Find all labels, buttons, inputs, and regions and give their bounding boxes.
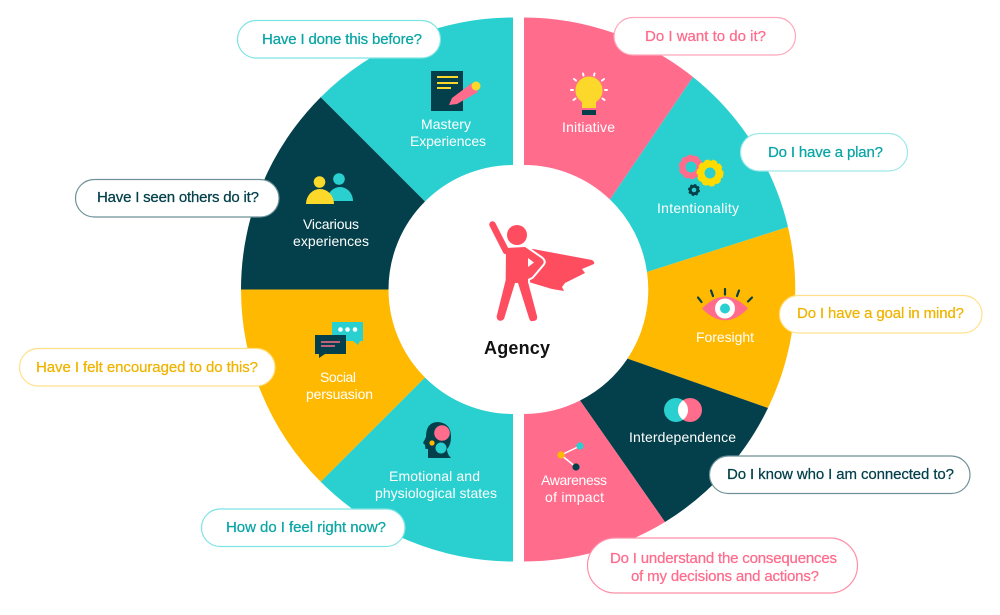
callout: How do I feel right now? <box>202 509 405 546</box>
label: Social persuasion: persuasion <box>306 386 373 402</box>
label: Social persuasion: Social <box>320 369 356 385</box>
label: Vicarious experiences <box>293 216 369 249</box>
label: Vicarious experiences: Vicarious <box>303 216 359 232</box>
label: Social persuasion <box>306 369 373 402</box>
icon: two people <box>306 173 353 204</box>
label: Emotional and physiological states <box>375 468 497 501</box>
callout: Do I know who I am connected to? <box>710 456 970 494</box>
wheel: agency ring <box>241 18 795 562</box>
label: Awareness of impact: Awareness <box>541 472 607 488</box>
callout: Do I want to do it? <box>614 18 796 55</box>
segment: vicarious experiences <box>241 97 425 290</box>
label: Vicarious experiences: experiences <box>293 233 369 249</box>
callout: Have I done this before?: Have I done this before? <box>262 31 422 48</box>
icon: superhero with cape <box>492 224 594 321</box>
callout: Do I understand the consequences of my decisions and actions?: of my decisions and actions? <box>631 568 819 585</box>
callout: Do I know who I am connected to?: Do I know who I am connected to? <box>727 466 954 483</box>
segment: emotional and physiological states <box>321 378 513 562</box>
callout: Do I understand the consequences of my decisions and actions? <box>588 538 858 593</box>
segment: initiative <box>524 18 693 200</box>
label: Foresight: Foresight <box>696 329 754 345</box>
callout: Have I felt encouraged to do this?: Have I felt encouraged to do this? <box>36 359 258 376</box>
label: Mastery Experiences <box>410 116 486 149</box>
label: Initiative: Initiative <box>562 119 615 135</box>
icon: eye <box>698 289 752 320</box>
icon: speech bubbles <box>315 322 363 358</box>
callout: Have I done this before? <box>238 20 440 58</box>
segment: social persuasion <box>241 290 425 482</box>
label: Awareness of impact: of impact <box>545 489 604 505</box>
label: Awareness of impact <box>541 472 607 505</box>
icon: lightbulb <box>571 74 607 115</box>
icon: connected nodes <box>557 442 584 471</box>
callout: Have I felt encouraged to do this? <box>20 348 275 386</box>
callout: Do I have a plan?: Do I have a plan? <box>768 144 883 161</box>
label: Intentionality: Intentionality <box>657 200 739 216</box>
icon: document and pencil <box>431 71 480 111</box>
label: Mastery Experiences: Mastery <box>421 116 471 132</box>
callout: Have I seen others do it?: Have I seen others do it? <box>97 189 259 206</box>
callout: Do I have a goal in mind? <box>780 296 982 333</box>
segment: foresight <box>628 227 795 408</box>
callout: Do I have a goal in mind?: Do I have a goal in mind? <box>797 305 964 322</box>
heading: Agency: Agency <box>484 338 550 358</box>
icon: overlapping circles <box>664 398 702 422</box>
callout: Have I seen others do it? <box>76 180 279 217</box>
segment: intentionality <box>610 77 788 272</box>
segment: interdependence <box>580 359 768 522</box>
label: Mastery Experiences: Experiences <box>410 133 486 149</box>
callout: How do I feel right now?: How do I feel right now? <box>226 519 386 536</box>
label: Interdependence: Interdependence <box>629 429 736 445</box>
segment: awareness of impact <box>524 400 665 562</box>
callout: Do I have a plan? <box>740 134 908 171</box>
callout: Do I understand the consequences of my decisions and actions?: Do I understand the consequences <box>610 550 837 567</box>
segment: mastery experiences <box>321 18 513 202</box>
icon: head with thoughts <box>423 422 451 458</box>
label: Emotional and physiological states: Emotional and <box>389 468 480 484</box>
icon: gears <box>680 156 722 195</box>
label: Emotional and physiological states: physiological states <box>375 485 497 501</box>
callout: Do I want to do it?: Do I want to do it? <box>645 28 766 45</box>
